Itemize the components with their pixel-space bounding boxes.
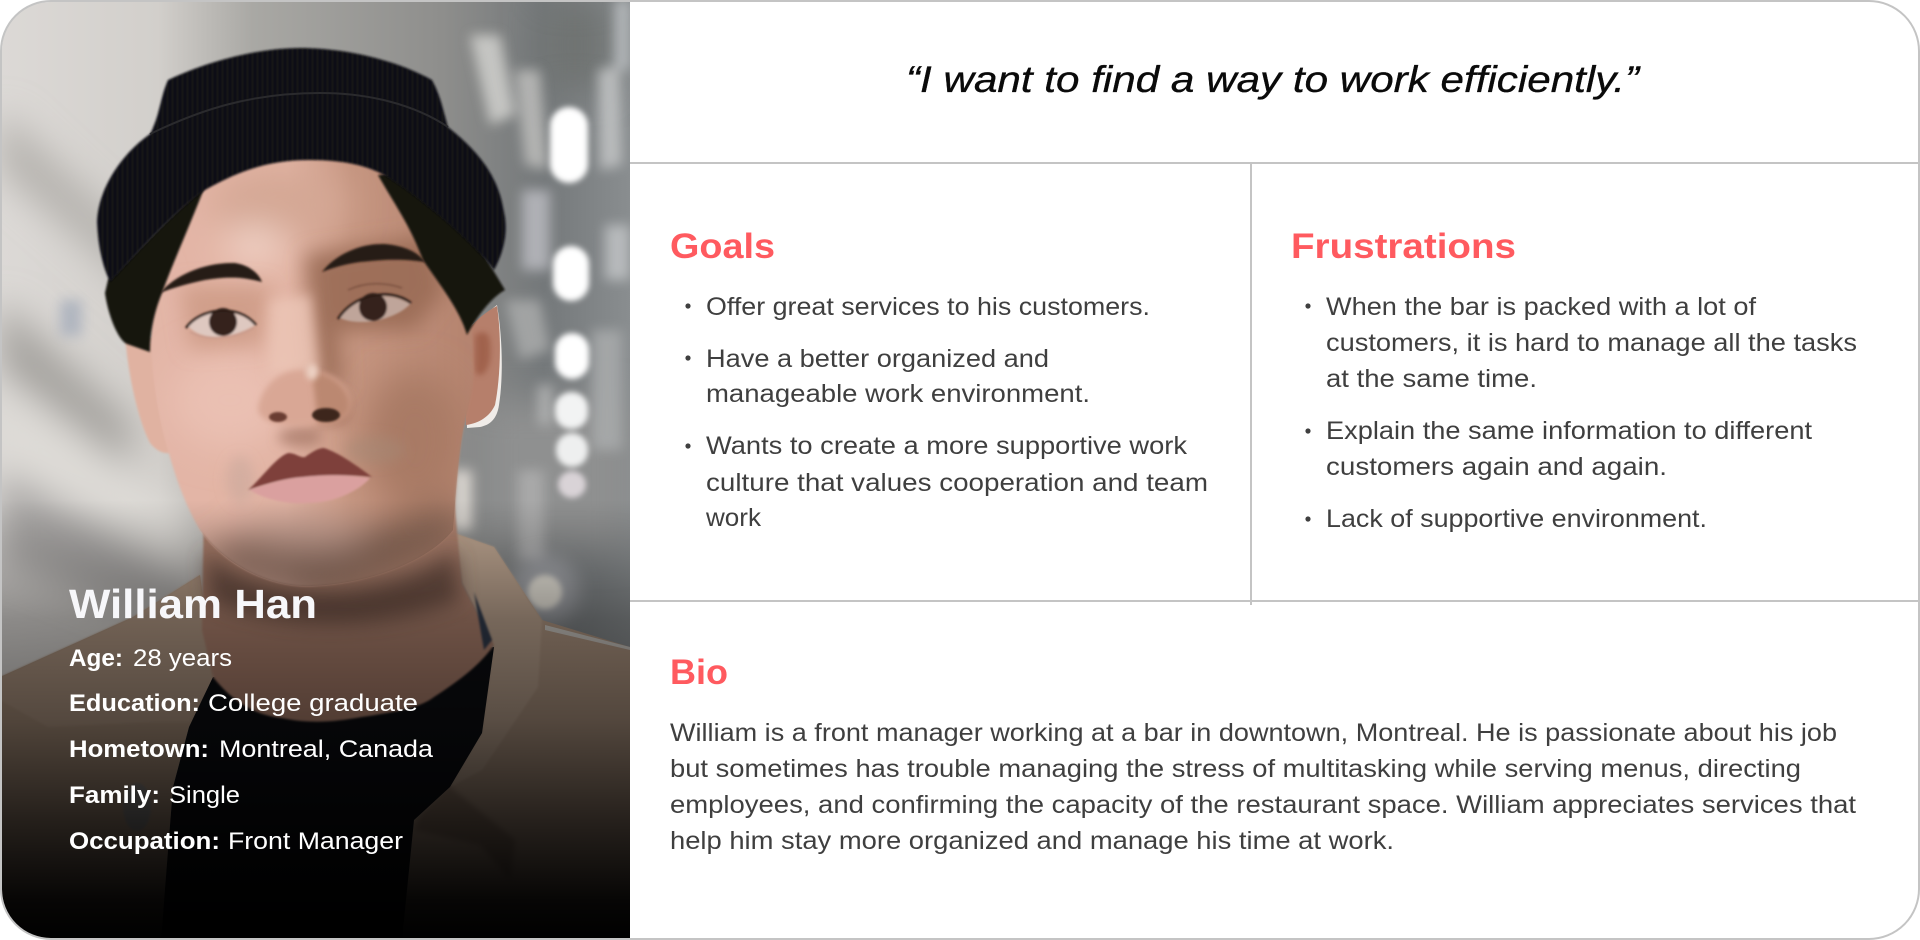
persona details xyxy=(69,581,434,855)
bio text: help him stay more organized and manage his time at work. xyxy=(670,827,1394,855)
frustrations list: customers again and again. xyxy=(1326,453,1667,481)
goals heading: Goals xyxy=(670,227,775,266)
goals list: culture that values cooperation and team xyxy=(706,469,1208,497)
nose xyxy=(269,408,340,422)
bio text: employees, and confirming the capacity of the restaurant space. William appreciates services that xyxy=(670,791,1856,819)
occupation: Front Manager xyxy=(228,828,403,855)
occupation: Occupation: xyxy=(69,828,220,855)
panel: portrait photo xyxy=(0,0,632,940)
name: William Han xyxy=(69,581,317,627)
goals list: Offer great services to his customers. xyxy=(706,293,1150,321)
ceiling lights xyxy=(550,107,589,498)
panel: goals xyxy=(670,227,1208,532)
education: College graduate xyxy=(208,690,418,717)
hometown: Montreal, Canada xyxy=(219,736,434,763)
panel: bio xyxy=(670,653,1856,855)
goals list: work xyxy=(705,504,762,532)
frustrations heading: Frustrations xyxy=(1291,227,1516,266)
hometown: Hometown: xyxy=(69,736,209,763)
beanie xyxy=(97,48,506,282)
bottom dark fade xyxy=(0,500,632,940)
eye: right xyxy=(338,284,411,322)
right ear xyxy=(465,305,502,428)
hometown xyxy=(70,740,433,760)
facial shading xyxy=(170,170,465,590)
left ear xyxy=(125,338,169,454)
jacket xyxy=(0,533,630,940)
age: 28 years xyxy=(133,645,232,672)
goals list: manageable work environment. xyxy=(706,380,1090,408)
goals list: Wants to create a more supportive work xyxy=(706,432,1188,460)
education: Education: xyxy=(69,690,200,717)
age: Age: xyxy=(69,645,123,672)
face xyxy=(151,145,473,590)
bio heading: Bio xyxy=(670,653,728,692)
bio text xyxy=(670,719,1856,855)
frustrations list: When the bar is packed with a lot of xyxy=(1326,293,1756,321)
lens flare xyxy=(511,556,579,624)
age xyxy=(70,649,232,671)
occupation xyxy=(70,832,403,854)
goals list xyxy=(685,293,1208,532)
shirt xyxy=(164,647,494,900)
goals list: Have a better organized and xyxy=(706,345,1049,373)
lips xyxy=(248,448,372,503)
education xyxy=(70,694,417,716)
eyebrows xyxy=(160,244,425,293)
frustrations list: customers, it is hard to manage all the tasks xyxy=(1326,329,1857,357)
panel: frustrations xyxy=(1291,227,1857,533)
frustrations list: Explain the same information to different xyxy=(1326,417,1812,445)
frustrations list xyxy=(1305,293,1857,533)
family: Single xyxy=(169,782,240,809)
family xyxy=(70,786,239,808)
frustrations list: Lack of supportive environment. xyxy=(1326,505,1707,533)
photo background: blurred corridor xyxy=(2,2,630,696)
hair xyxy=(105,170,505,352)
neck xyxy=(202,500,494,722)
bio text: William is a front manager working at a bar in downtown, Montreal. He is passionate about his job xyxy=(670,719,1837,747)
eye: left xyxy=(186,308,256,338)
quote: “I want to find a way to work efficiently.” xyxy=(906,59,1641,100)
family: Family: xyxy=(69,782,160,809)
bio text: but sometimes has trouble managing the stress of multitasking while serving menus, directing xyxy=(670,755,1801,783)
frustrations list: at the same time. xyxy=(1326,365,1537,393)
